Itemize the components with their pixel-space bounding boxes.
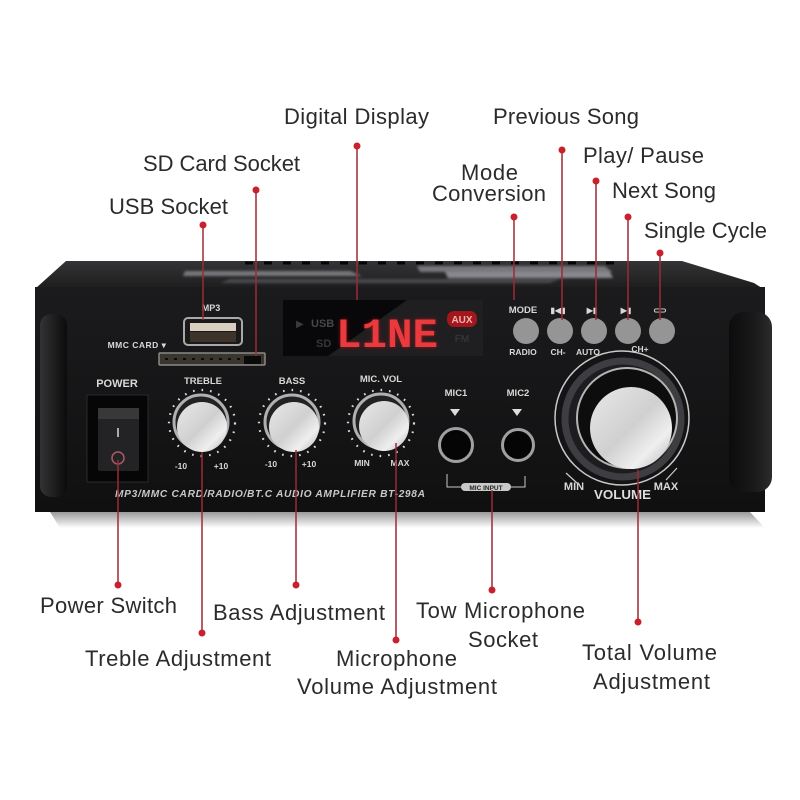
control buttons: ⊂⊃ [653, 306, 667, 315]
label: Total Volume Adjustment: Adjustment [593, 669, 710, 694]
digital display [283, 300, 483, 360]
leader: previous song [558, 146, 566, 320]
control buttons: CH- [550, 347, 566, 357]
control buttons: ▶▮ [620, 306, 631, 315]
amplifier [35, 261, 772, 528]
leader: bass [292, 450, 300, 588]
volume knob: VOLUME [594, 487, 651, 502]
control buttons: MODE [509, 305, 537, 316]
treble knob [169, 376, 235, 471]
mic sockets: MIC INPUT [469, 485, 503, 492]
label: Previous Song: Previous Song [493, 104, 639, 129]
label: Next Song: Next Song [612, 178, 716, 203]
control buttons: RADIO [509, 347, 537, 357]
USB port [184, 303, 242, 345]
label: USB Socket: USB Socket [109, 194, 228, 219]
bass knob: +10 [302, 459, 316, 469]
leader: next song [624, 214, 632, 320]
volume knob: MIN [564, 481, 584, 493]
floor shadow [50, 512, 765, 528]
model line: MP3/MMC CARD/RADIO/BT.C AUDIO AMPLIFIER BT-298A [115, 489, 425, 500]
power switch [87, 378, 148, 482]
label: Mode Conversion: Conversion [432, 181, 546, 206]
SD card slot: MMC CARD ▾ [108, 340, 167, 350]
volume knob [555, 351, 689, 502]
control buttons [509, 305, 675, 357]
label: Single Cycle: Single Cycle [644, 218, 767, 243]
bass knob: BASS [279, 376, 305, 387]
leader: total volume [634, 470, 642, 626]
mic volume knob: MIC. VOL [360, 374, 402, 385]
label: Play/ Pause: Play/ Pause [583, 143, 704, 168]
bass knob: -10 [265, 459, 277, 469]
digital display: AUX [451, 315, 473, 326]
mic volume knob [348, 374, 414, 468]
leader: microphone socket [488, 490, 496, 594]
leader: play pause [592, 178, 600, 320]
label: Total Volume Adjustment [582, 640, 717, 694]
mic volume knob: MAX [391, 458, 410, 468]
treble knob: +10 [214, 461, 228, 471]
mic sockets [440, 388, 534, 492]
label: Mode Conversion: Mode [461, 160, 518, 185]
digital display: SD [316, 338, 331, 350]
control buttons: ▶▮ [586, 306, 597, 315]
label: Power Switch: Power Switch [40, 593, 177, 618]
treble knob: -10 [175, 461, 187, 471]
control buttons: ▮◀▮ [551, 306, 565, 315]
control buttons: CH+ [631, 344, 649, 354]
leader: microphone volume [392, 443, 400, 644]
mic sockets: MIC1 [445, 388, 468, 399]
leader: treble [198, 452, 206, 636]
digital display: FM [455, 334, 469, 345]
label: Total Volume Adjustment: Total Volume [582, 640, 717, 665]
USB port: MP3 [202, 303, 220, 313]
mic sockets: MIC2 [507, 388, 529, 399]
control buttons: AUTO [576, 347, 600, 357]
label: SD Card Socket: SD Card Socket [143, 151, 300, 176]
SD card slot [108, 340, 265, 365]
label: Digital Display: Digital Display [284, 104, 429, 129]
bass knob [259, 376, 325, 469]
treble knob: TREBLE [184, 376, 222, 387]
label: Mode Conversion [432, 160, 546, 206]
digital display: USB [311, 318, 334, 330]
label: Microphone Volume Adjustment [297, 646, 497, 699]
label: Microphone Volume Adjustment: Microphone [336, 646, 457, 671]
leader: digital display [354, 142, 360, 300]
label: Tow Microphone Socket: Socket [468, 627, 538, 652]
front panel [35, 287, 765, 512]
leader: power switch [114, 460, 122, 588]
digital display: L1NE [336, 312, 438, 360]
mic volume knob: MIN [354, 458, 370, 468]
label: Tow Microphone Socket: Tow Microphone [416, 598, 585, 623]
top surface [36, 261, 765, 290]
leader: mode conversion [510, 214, 518, 300]
label: Bass Adjustment: Bass Adjustment [213, 600, 385, 625]
leader: USB socket [200, 222, 206, 320]
label: Microphone Volume Adjustment: Volume Adjustment [297, 674, 497, 699]
power switch: POWER [96, 378, 138, 390]
digital display: L1NE [336, 312, 438, 360]
volume knob: MAX [654, 481, 679, 493]
label: Treble Adjustment: Treble Adjustment [85, 646, 271, 671]
left handle [40, 314, 67, 497]
right handle [729, 312, 772, 492]
label: Tow Microphone Socket [416, 598, 585, 652]
digital display: ▶ [296, 319, 304, 330]
leader: single cycle [656, 250, 664, 320]
leader: SD card socket [252, 186, 260, 356]
